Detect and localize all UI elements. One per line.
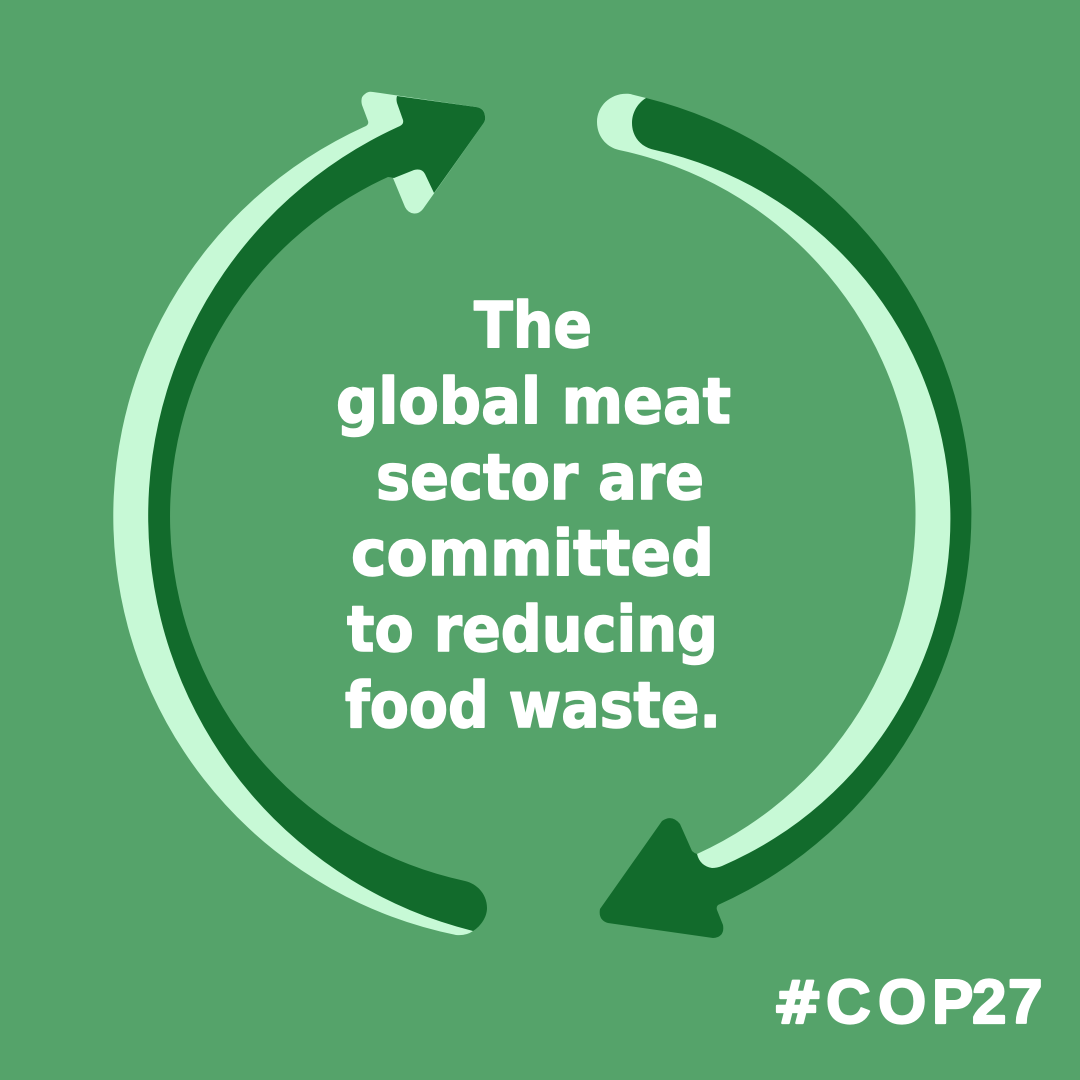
line: to reducing: to reducing xyxy=(347,593,718,666)
right arrow light shadow xyxy=(597,94,960,875)
left circular arrow xyxy=(113,92,487,935)
left arrow light shadow xyxy=(113,92,485,935)
line: sector are: sector are xyxy=(376,441,704,514)
headline text xyxy=(336,289,731,742)
right arrow dark body and head xyxy=(600,98,971,938)
right circular arrow xyxy=(597,94,971,938)
left arrow dark body and head xyxy=(148,96,487,931)
line: committed: committed xyxy=(351,517,714,590)
line: The: The xyxy=(474,289,592,362)
line: global meat: global meat xyxy=(336,365,731,438)
hashtag: #COP27 xyxy=(773,968,1042,1037)
line: food waste.: food waste. xyxy=(345,669,721,742)
